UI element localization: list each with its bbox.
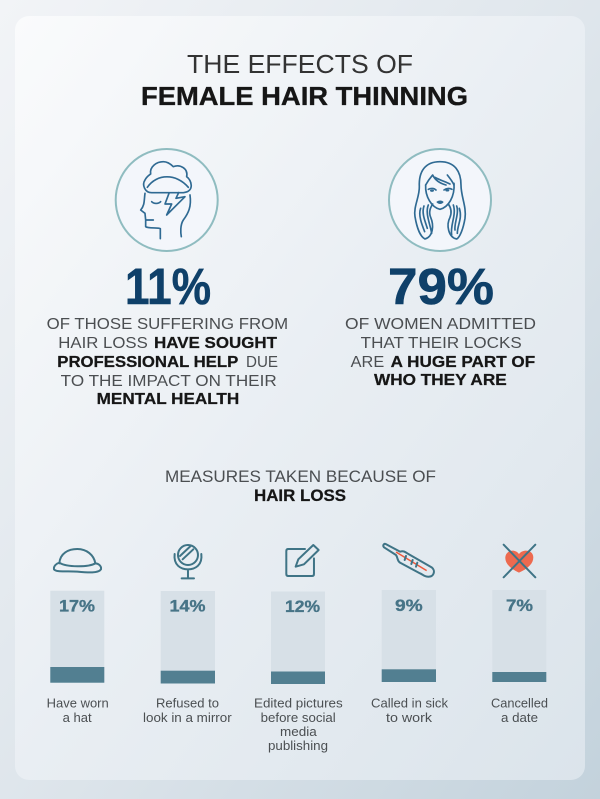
text block: mental health: TO THE IMPACT ON THEIR	[61, 373, 277, 390]
label: cancelled a date	[491, 696, 548, 725]
text block: mental health: MENTAL HEALTH	[97, 391, 239, 408]
text block: locks	[345, 316, 536, 389]
title: FEMALE HAIR THINNING	[141, 81, 468, 111]
text block: locks: A HUGE PART OF	[391, 354, 535, 371]
bar: 12%	[271, 592, 325, 684]
label: hat: Have worn	[47, 696, 109, 710]
title: THE EFFECTS OF	[187, 49, 413, 79]
bar: 12%: 12%	[285, 597, 320, 616]
icon: crossed heart	[504, 545, 535, 577]
label: called in sick: to work	[386, 711, 433, 725]
stat: 79%: 79%	[388, 258, 494, 315]
bar: 7%: 7%	[506, 596, 533, 615]
text block: locks: ARE	[351, 354, 384, 371]
label: mirror: look in a mirror	[143, 711, 232, 725]
label: edited pictures: media	[280, 725, 317, 739]
label: cancelled a date: a date	[501, 711, 538, 725]
text block: mental health: HAIR LOSS	[58, 335, 148, 352]
bar: 17%: 17%	[59, 596, 95, 616]
label: edited pictures: Edited pictures	[254, 696, 343, 710]
bar: 14%	[161, 591, 215, 684]
label: mirror: Refused to	[156, 696, 219, 710]
text block: mental health: PROFESSIONAL HELP	[57, 354, 239, 371]
label: mirror	[143, 696, 232, 725]
label: edited pictures: publishing	[268, 739, 328, 753]
label: cancelled a date: Cancelled	[491, 696, 548, 710]
icon: hat	[54, 549, 101, 572]
bar: 9%: 9%	[395, 596, 423, 615]
section heading: measures: MEASURES TAKEN BECAUSE OF	[165, 468, 436, 486]
section heading: measures	[165, 468, 436, 505]
text block: locks: THAT THEIR LOCKS	[361, 335, 522, 352]
text block: mental health	[47, 316, 288, 408]
section heading: measures: HAIR LOSS	[254, 487, 346, 505]
text block: mental health: OF THOSE SUFFERING FROM	[47, 316, 288, 333]
text block: locks: WHO THEY ARE	[374, 372, 507, 389]
title	[141, 49, 468, 111]
stat: 11%: 11%	[125, 258, 211, 315]
text block: mental health: DUE	[246, 354, 278, 371]
text block: mental health: HAVE SOUGHT	[154, 335, 277, 352]
icon: mirror	[174, 545, 201, 578]
text block: locks: OF WOMEN ADMITTED	[345, 316, 536, 333]
bar: 7%	[492, 590, 546, 682]
label: edited pictures	[254, 696, 343, 753]
label: hat	[47, 696, 109, 725]
label: edited pictures: before social	[261, 711, 336, 725]
bar: 17%	[50, 591, 104, 683]
icon: woman with long hair	[389, 149, 491, 251]
label: hat: a hat	[63, 711, 92, 725]
icon: head with storm cloud	[116, 149, 218, 251]
bar: 9%	[382, 590, 436, 682]
label: called in sick	[371, 696, 449, 725]
icon: edit pencil	[286, 545, 319, 576]
label: called in sick: Called in sick	[371, 696, 449, 710]
bar: 14%: 14%	[170, 596, 206, 616]
icon: thermometer	[383, 544, 434, 577]
